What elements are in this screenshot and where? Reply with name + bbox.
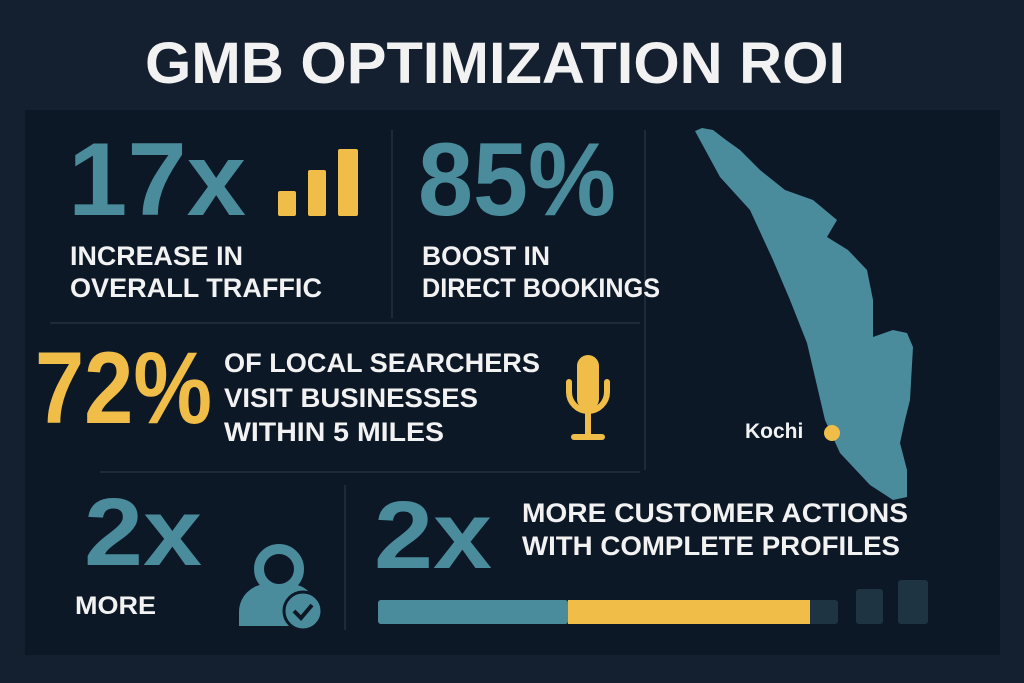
stat: 2x customer actions: WITH COMPLETE PROFILES — [522, 531, 900, 561]
map: Kerala with Kochi — [695, 128, 913, 500]
icon: bar chart — [278, 149, 358, 216]
stat: 2x more — [75, 479, 322, 630]
stat: 17x traffic: INCREASE IN — [70, 241, 243, 271]
stat: 17x traffic: OVERALL TRAFFIC — [70, 273, 322, 303]
icon: verified user — [239, 549, 322, 630]
stat: 2x customer actions: 2x — [374, 482, 492, 589]
stat: 72% local searchers — [35, 331, 607, 447]
stat: 72% local searchers: WITHIN 5 MILES — [224, 417, 444, 447]
progress bar — [378, 580, 928, 624]
stat: 17x traffic — [68, 122, 358, 303]
stat: 85% bookings — [418, 122, 660, 303]
stat: 2x more: MORE — [75, 592, 156, 620]
stat: 85% bookings: 85% — [418, 122, 616, 238]
stat: 2x customer actions — [374, 482, 928, 624]
stat: 72% local searchers: 72% — [35, 331, 212, 445]
stat: 72% local searchers: VISIT BUSINESSES — [224, 383, 478, 413]
stat: 85% bookings: DIRECT BOOKINGS — [422, 273, 660, 303]
map: Kerala with Kochi: Kochi — [745, 420, 803, 443]
stat: 85% bookings: BOOST IN — [422, 241, 550, 271]
stat: 2x customer actions: MORE CUSTOMER ACTIONS — [522, 498, 908, 528]
stat: 72% local searchers: OF LOCAL SEARCHERS — [224, 348, 540, 378]
title: GMB OPTIMIZATION ROI — [145, 31, 845, 96]
main panel — [25, 110, 1000, 655]
stat: 17x traffic: 17x — [68, 122, 246, 238]
stat: 2x more: 2x — [84, 479, 202, 586]
icon: microphone — [569, 355, 607, 437]
